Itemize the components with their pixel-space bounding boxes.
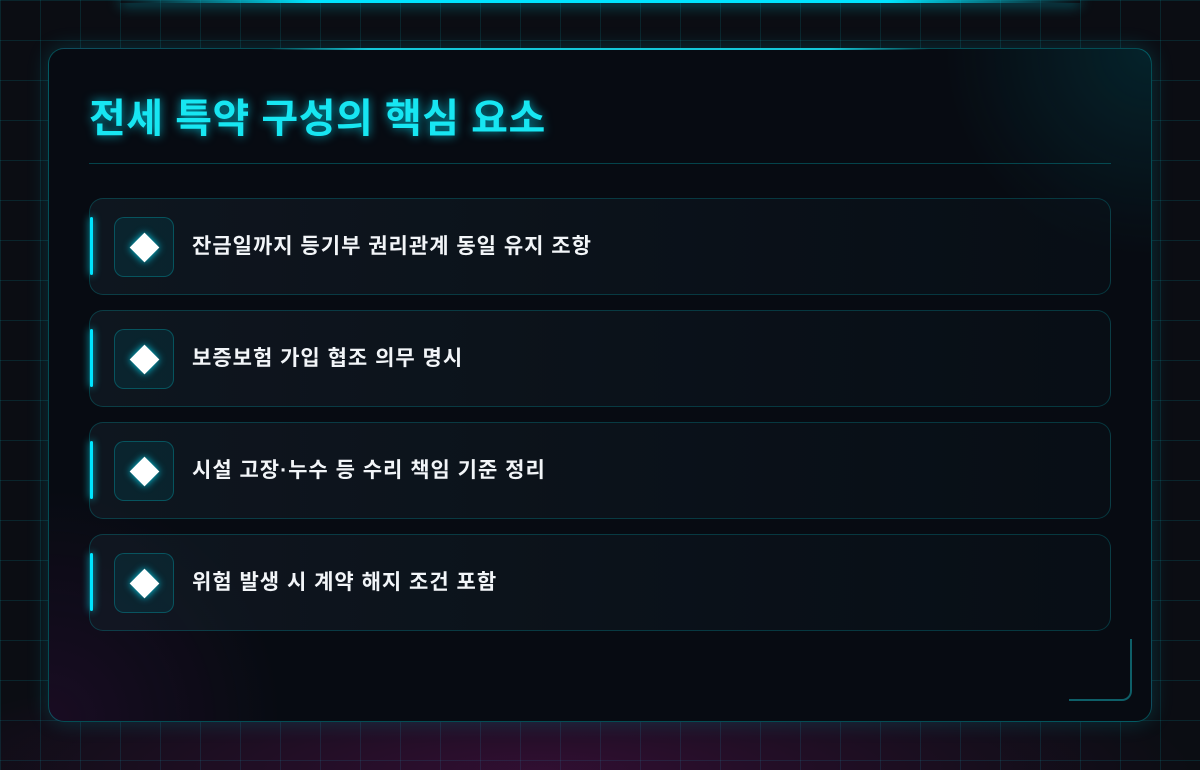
text 3: 시설 고장·누수 등 수리 책임 기준 정리 <box>192 459 546 482</box>
item 4 <box>89 534 1111 631</box>
item 2 <box>89 310 1111 407</box>
title: 전세 특약 구성의 핵심 요소 <box>89 97 546 141</box>
text 4: 위험 발생 시 계약 해지 조건 포함 <box>192 571 497 594</box>
item 1 <box>89 198 1111 295</box>
text 1: 잔금일까지 등기부 권리관계 동일 유지 조항 <box>192 235 592 258</box>
corner bracket <box>1069 639 1132 701</box>
icon: diamond <box>114 217 174 277</box>
icon: diamond <box>114 329 174 389</box>
icon: diamond <box>114 553 174 613</box>
item 3 <box>89 422 1111 519</box>
text 2: 보증보험 가입 협조 의무 명시 <box>192 347 463 370</box>
icon: diamond <box>114 441 174 501</box>
